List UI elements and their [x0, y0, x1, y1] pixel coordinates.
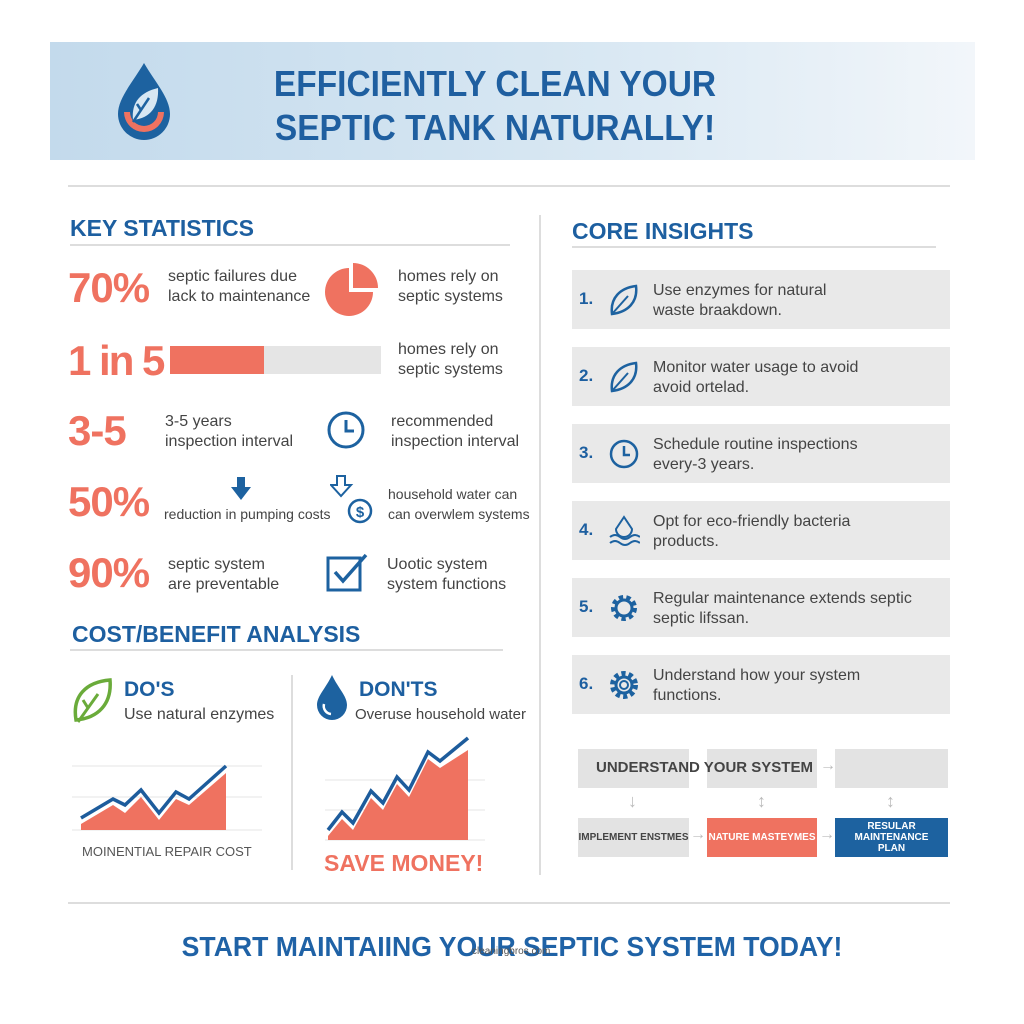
panel: do's: [72, 678, 274, 859]
flowchart: [578, 749, 948, 857]
panel: key statistics: inspection interval: [391, 433, 519, 450]
insight 1: 1.: [579, 289, 593, 308]
insight 1: waste braakdown.: [653, 302, 782, 319]
insight 5: 5.: [579, 597, 593, 616]
insight 2: [572, 347, 950, 406]
icon: leaf: [74, 678, 112, 723]
icon: arrow with dollar: [330, 475, 372, 524]
panel: do's: Use natural enzymes: [124, 706, 274, 723]
insight 1: [572, 270, 950, 329]
panel: key statistics: 3-5 years: [165, 413, 232, 430]
insight 1: Use enzymes for natural: [653, 282, 826, 299]
panel: key statistics: recommended: [391, 413, 493, 430]
stat 50%: 50%: [68, 478, 149, 525]
insight 5: [572, 578, 950, 637]
stat 3-5: 3-5: [68, 407, 126, 454]
header band: [50, 42, 975, 160]
insight 6: 6.: [579, 674, 593, 693]
insight 6: functions.: [653, 687, 721, 704]
flowchart: →: [819, 826, 835, 843]
flowchart: UNDERSTAND YOUR SYSTEM: [596, 759, 813, 776]
flowchart: NATURE MASTEYMES: [708, 832, 816, 843]
panel: don'ts: DON'TS: [359, 678, 438, 701]
insight 4: Opt for eco-friendly bacteria: [653, 513, 850, 530]
insight 4: products.: [653, 533, 719, 550]
stat 70%: 70%: [68, 264, 149, 311]
panel: key statistics: [68, 263, 530, 596]
panel: do's: DO'S: [124, 678, 175, 701]
insight 4: 4.: [579, 520, 593, 539]
panel: key statistics: inspection interval: [165, 433, 293, 450]
icon: checkbox: [326, 554, 368, 592]
watermark: cleaningbros.com: [472, 946, 550, 957]
panel: key statistics: reduction in pumping costs: [164, 506, 331, 522]
panel: key statistics: Uootic system: [387, 556, 487, 573]
flowchart: RESULAR MAINTENANCE: [855, 821, 928, 843]
icon: pie: [325, 263, 378, 316]
heading: core insights: CORE INSIGHTS: [572, 218, 753, 244]
icon: clock: [328, 412, 364, 448]
insight 3: [572, 424, 950, 483]
panel: key statistics: homes rely on: [398, 341, 498, 358]
insight 4: [572, 501, 950, 560]
stat 1 in 5: 1 in 5: [68, 337, 163, 384]
title: [274, 63, 716, 148]
panel: key statistics: household water can: [388, 486, 517, 502]
title: SEPTIC TANK NATURALLY!: [275, 107, 715, 148]
insight 3: 3.: [579, 443, 593, 462]
insight 2: 2.: [579, 366, 593, 385]
heading: cost/benefit: COST/BENEFIT ANALYSIS: [72, 621, 360, 647]
flowchart: →: [690, 826, 706, 843]
icon: arrow down: [231, 477, 251, 500]
insight 6: Understand how your system: [653, 667, 860, 684]
panel: do's: MOINENTIAL REPAIR COST: [82, 844, 252, 859]
panel: don'ts: Overuse household water: [355, 706, 526, 723]
chart: repair cost: [72, 764, 262, 830]
insight 3: every-3 years.: [653, 456, 754, 473]
panel: don'ts: [317, 675, 526, 876]
panel: key statistics: septic systems: [398, 288, 503, 305]
flowchart: ↓: [628, 791, 637, 811]
heading: key statistics: KEY STATISTICS: [70, 215, 254, 241]
icon: arrow with dollar: $: [356, 504, 365, 521]
insight 3: Schedule routine inspections: [653, 436, 858, 453]
chart: save money: [325, 736, 485, 840]
panel: key statistics: can overwlem systems: [388, 506, 530, 522]
panel: key statistics: are preventable: [168, 576, 279, 593]
panel: key statistics: septic systems: [398, 361, 503, 378]
flowchart: ↕: [886, 791, 895, 811]
flowchart: ↕: [757, 791, 766, 811]
panel: key statistics: lack to maintenance: [168, 288, 310, 305]
panel: key statistics: homes rely on: [398, 268, 498, 285]
panel: key statistics: septic failures due: [168, 268, 297, 285]
icon: water drop: [317, 675, 347, 720]
insight 5: septic lifssan.: [653, 610, 749, 627]
panel: key statistics: septic system: [168, 556, 265, 573]
insight 6: [572, 655, 950, 714]
stat 90%: 90%: [68, 549, 149, 596]
insight 2: avoid ortelad.: [653, 379, 749, 396]
panel: don'ts: SAVE MONEY!: [324, 850, 483, 876]
panel: key statistics: system functions: [387, 576, 506, 593]
flowchart: →: [820, 757, 836, 774]
title: EFFICIENTLY CLEAN YOUR: [274, 63, 716, 104]
flowchart: PLAN: [878, 843, 905, 854]
insight 5: Regular maintenance extends septic: [653, 590, 912, 607]
footer call to action: START MAINTAIING YOUR SEPTIC SYSTEM TODAY!: [182, 931, 842, 962]
flowchart: IMPLEMENT ENSTMES: [578, 832, 688, 843]
insight 2: Monitor water usage to avoid: [653, 359, 858, 376]
icon: drop with leaf: [118, 63, 170, 140]
